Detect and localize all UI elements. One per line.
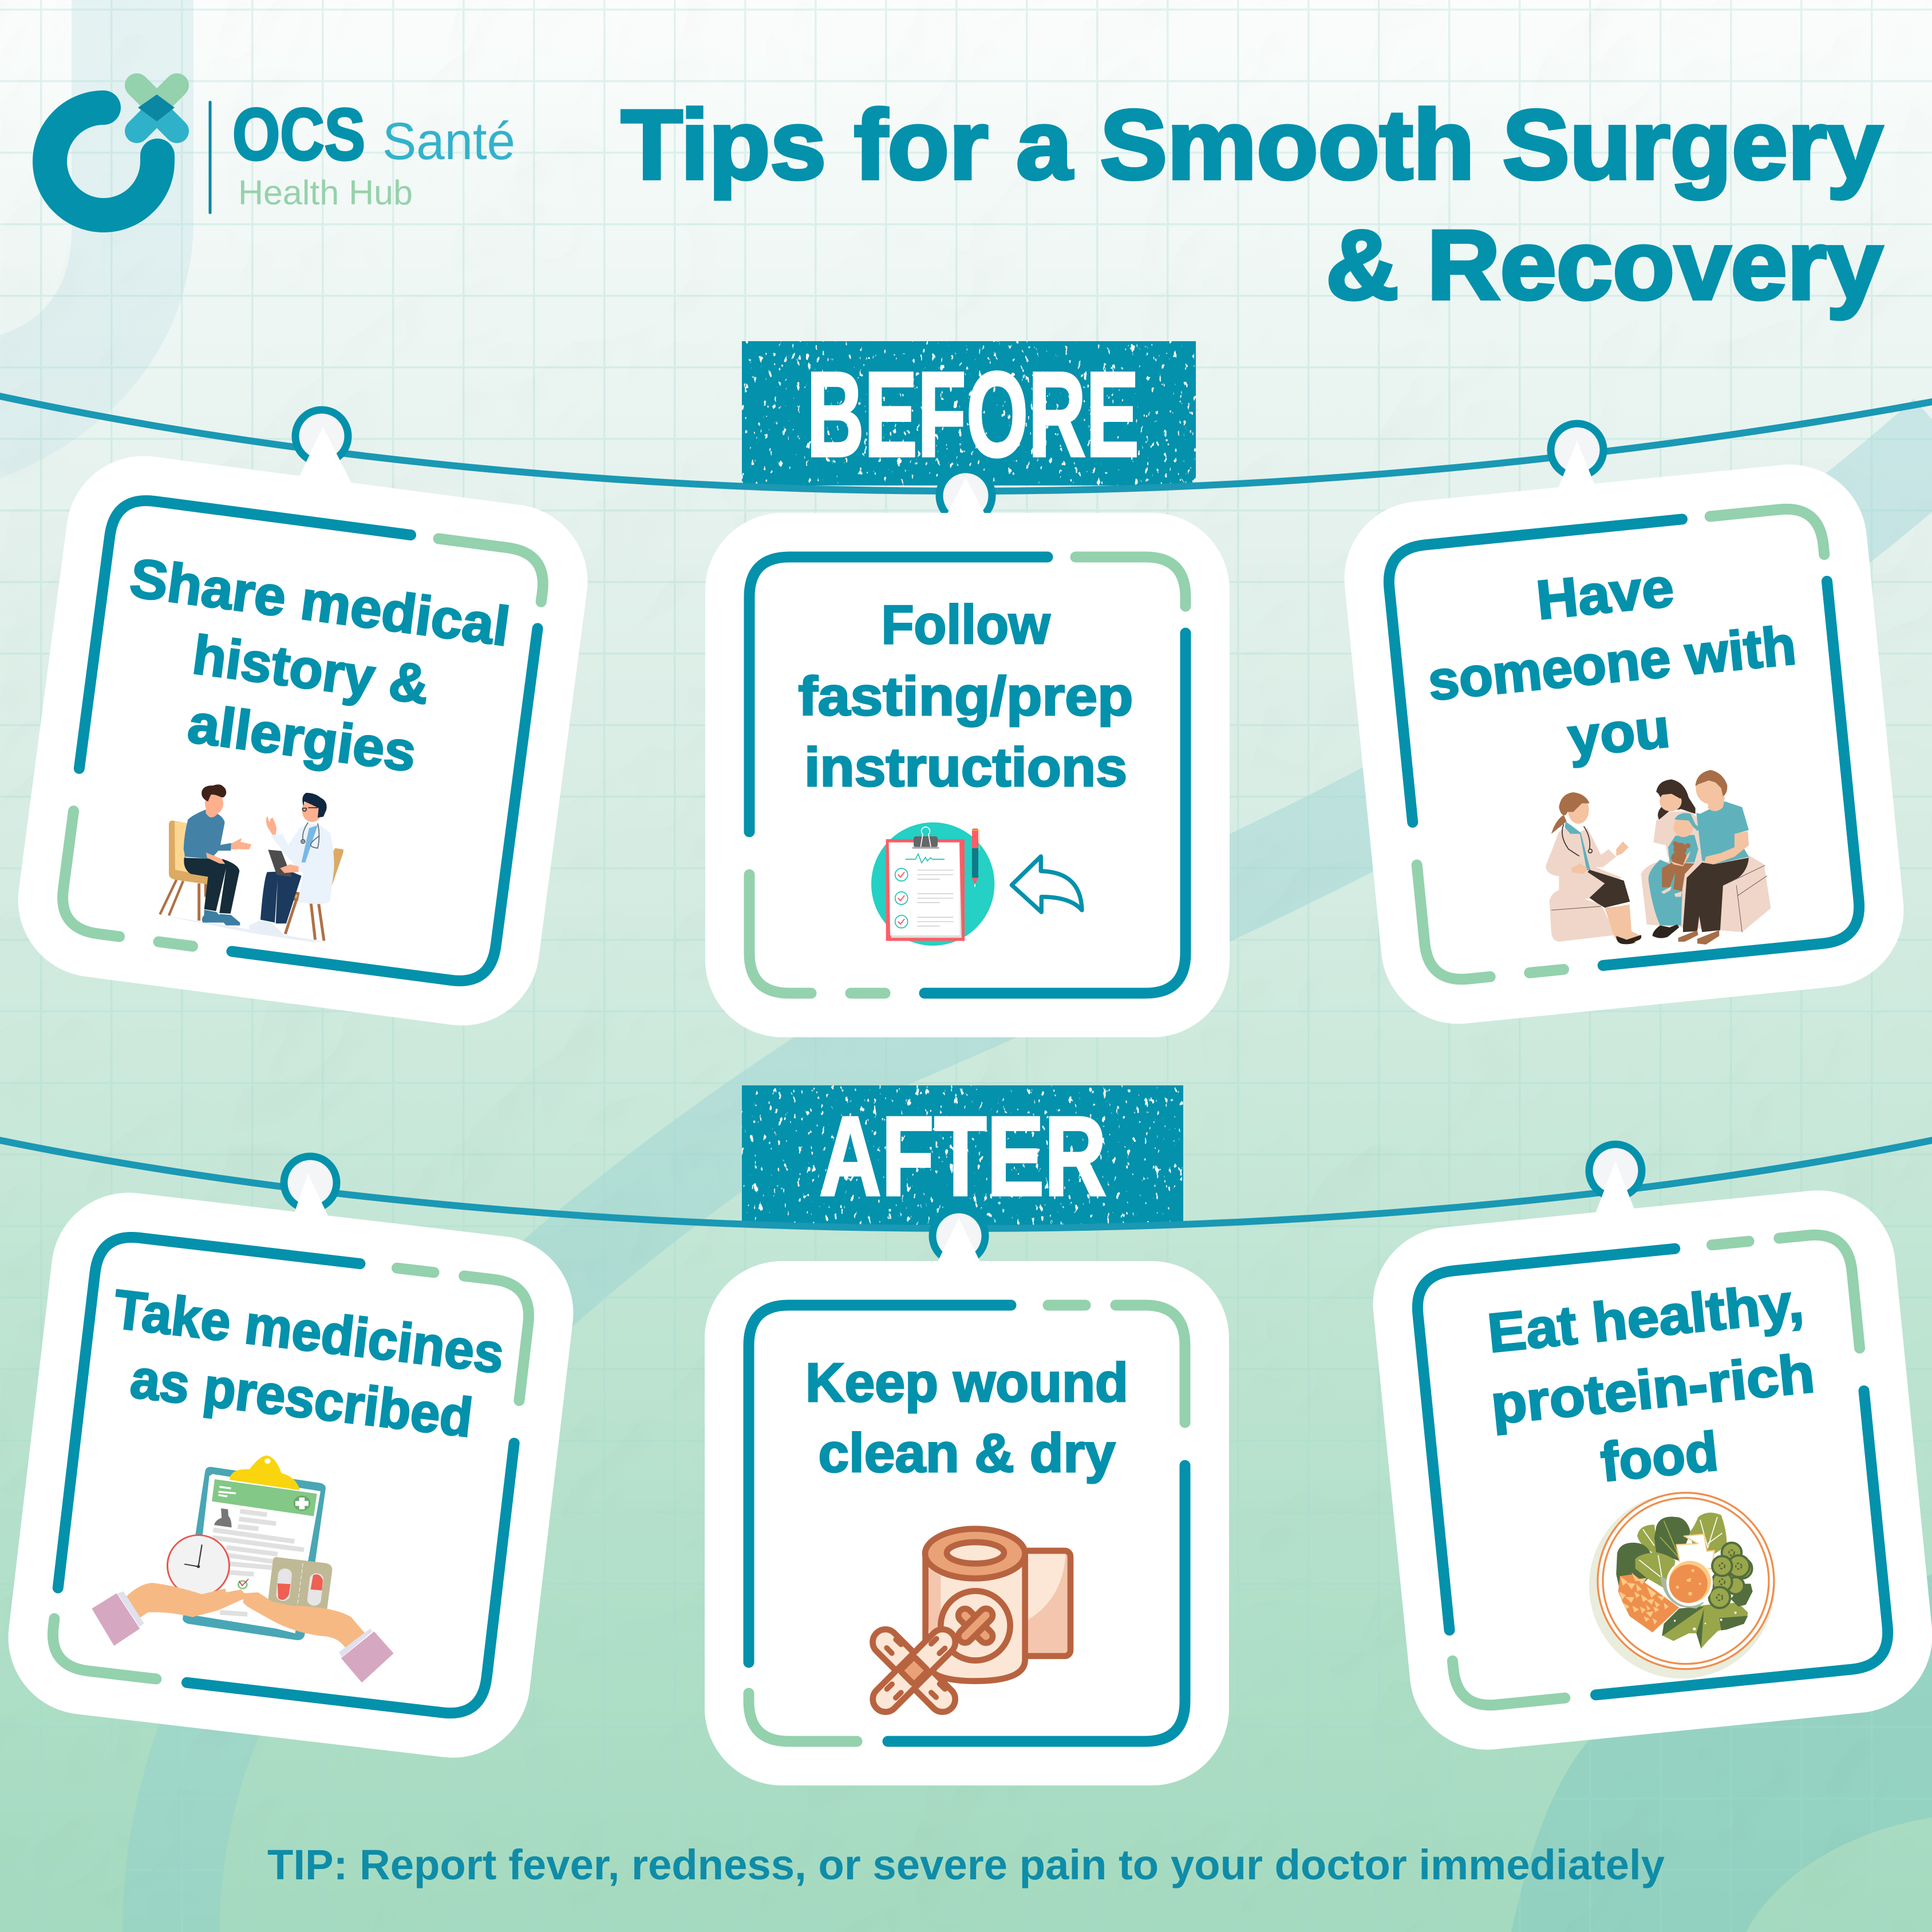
icon: return arrow — [1012, 856, 1082, 912]
heading: fasting/prep — [798, 666, 1133, 727]
icon: food plate — [1589, 1492, 1775, 1678]
heading — [805, 1352, 1128, 1484]
banner: BEFORE: BEFORE — [807, 346, 1139, 482]
icon: hands with clipboard, clock and pills — [92, 1456, 394, 1682]
pin 1 — [292, 410, 356, 492]
icon: bandage roll and plasters — [867, 1529, 1070, 1717]
logo divider — [208, 101, 212, 214]
heading: Have — [1534, 556, 1676, 631]
pin 4 — [284, 1156, 338, 1236]
heading: Take medicines — [110, 1278, 507, 1385]
heading: food — [1598, 1421, 1721, 1494]
card: take medicines as prescribed — [0, 1184, 582, 1766]
heading: as prescribed — [128, 1348, 476, 1449]
heading — [102, 1278, 507, 1452]
pin 5 — [933, 1210, 985, 1264]
pin 3 — [1551, 424, 1603, 498]
icon: patient and doctor — [155, 784, 343, 942]
heading — [1481, 1271, 1824, 1504]
logo — [50, 85, 515, 215]
card: follow fasting/prep instructions — [705, 513, 1230, 1037]
logo text OCS: OCS — [232, 94, 365, 176]
logo cross — [137, 85, 177, 131]
card: share medical history — [9, 447, 597, 1035]
title — [621, 90, 1883, 320]
logo text Santé: Santé — [382, 112, 515, 171]
heading: Keep wound — [805, 1352, 1128, 1413]
banner: AFTER: AFTER — [819, 1093, 1107, 1219]
card: have someone with you — [1337, 457, 1911, 1031]
banner: BEFORE — [742, 341, 1196, 485]
logo text Health Hub: Health Hub — [238, 173, 413, 212]
heading: Eat healthy, — [1485, 1272, 1806, 1364]
heading: allergies — [184, 693, 420, 783]
icon: clipboard checklist — [871, 823, 1082, 946]
heading: Share medical — [127, 547, 513, 658]
rope: after — [0, 1139, 1932, 1228]
heading: protein-rich — [1488, 1342, 1817, 1436]
heading: instructions — [804, 737, 1127, 798]
heading: you — [1565, 697, 1673, 768]
title: Tips for a Smooth Surgery — [621, 90, 1883, 200]
heading — [798, 594, 1133, 798]
icon: doctor talking to family — [1546, 770, 1771, 945]
logo mark C — [50, 108, 157, 215]
card: keep wound clean and dry — [705, 1261, 1229, 1785]
heading: clean & dry — [819, 1423, 1115, 1484]
heading: history & — [189, 624, 433, 716]
rope: before — [0, 395, 1932, 491]
pin 6 — [1589, 1144, 1642, 1216]
heading: someone with — [1425, 615, 1799, 712]
title: & Recovery — [1326, 210, 1883, 320]
card: eat healthy, protein-rich food — [1366, 1183, 1932, 1757]
heading — [1419, 545, 1805, 782]
pin 2 — [939, 469, 992, 522]
tip text: TIP: Report fever, redness, or severe pain to your doctor immediately — [267, 1841, 1665, 1888]
heading: Follow — [882, 594, 1050, 655]
heading — [109, 547, 513, 793]
